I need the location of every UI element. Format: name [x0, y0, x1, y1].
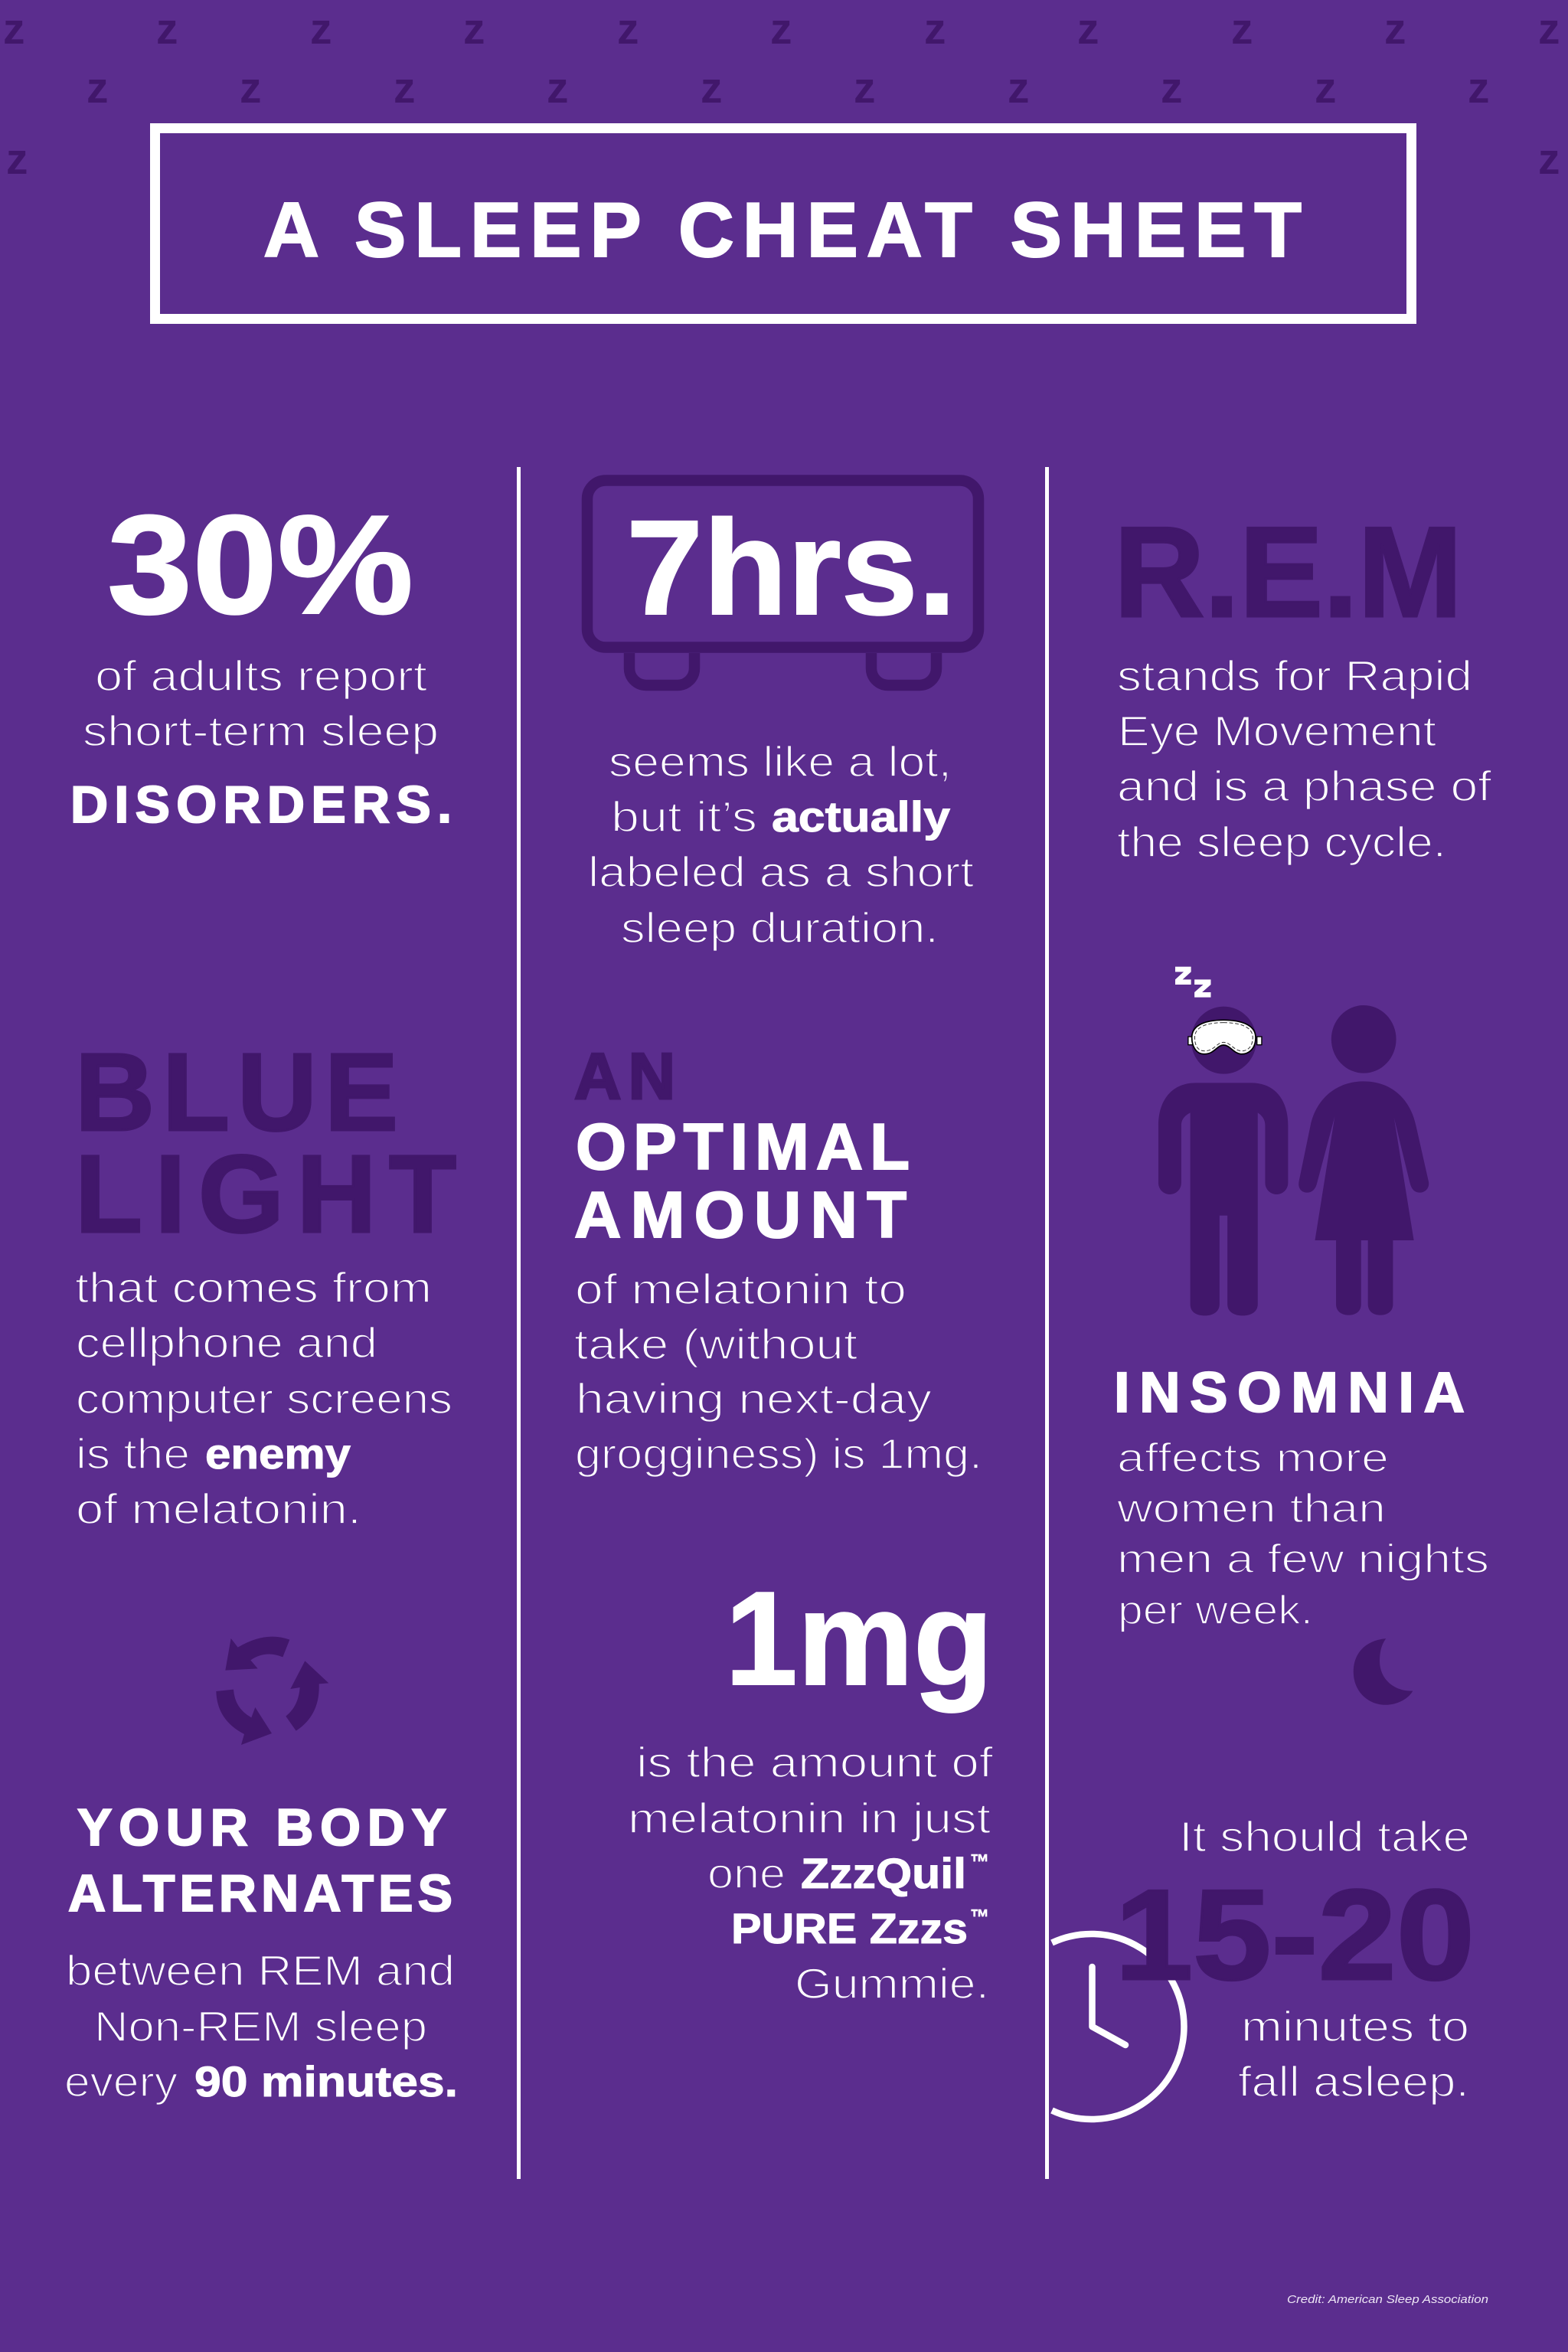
text: insomnia body [1116, 1436, 1489, 1633]
panel: optimal amount [574, 1040, 982, 1478]
text: 7hrs body: sleep duration. [621, 903, 939, 952]
text: 7hrs body [588, 737, 974, 952]
text: 1mg body: ™ [970, 1906, 989, 1930]
background z pattern: z [156, 5, 178, 54]
text: between REM [64, 1946, 458, 2105]
text: insomnia body: per week. [1118, 1588, 1313, 1633]
background z pattern: z [3, 5, 24, 54]
text: between REM: 90 minutes. [194, 2057, 458, 2105]
background z pattern: z [240, 64, 262, 113]
heading: your body alternates: ALTERNATES [68, 1864, 452, 1922]
text: REM body: the sleep cycle. [1117, 818, 1446, 866]
text: blue light body: computer screens [76, 1374, 452, 1423]
text: 1mg body [628, 1738, 994, 2007]
stat: 15-20: 15-20 [1115, 1863, 1475, 2007]
heading: blue light [75, 1031, 456, 1256]
text: insomnia body: women than [1116, 1486, 1386, 1531]
text: optimal body [574, 1265, 982, 1478]
text: 7hrs body: but it’s [611, 792, 757, 841]
text: blue light body: cellphone and [76, 1318, 377, 1367]
text: blue light body: that comes from [75, 1263, 432, 1312]
background z pattern: z [1231, 5, 1253, 54]
credit: Credit: American Sleep Association [1287, 2294, 1488, 2306]
background z pattern: z [1161, 64, 1182, 113]
background z pattern: z [854, 64, 876, 113]
text: blue light body: of melatonin. [76, 1485, 361, 1533]
text: between REM: between REM and [66, 1946, 455, 1994]
icon: bed [587, 481, 978, 685]
heading: an optimal amount [574, 1040, 910, 1252]
text: REM body: and is a phase of [1117, 762, 1491, 810]
background z pattern: z [701, 64, 723, 113]
text: 1mg body: is the amount of [636, 1738, 994, 1786]
panel: REM [1114, 500, 1491, 866]
text: between REM: every [64, 2057, 178, 2105]
heading: R.E.M: R.E.M [1114, 500, 1462, 644]
heading: your body alternates: YOUR BODY [77, 1798, 446, 1857]
text: REM body [1117, 652, 1491, 866]
background z pattern: z [1538, 135, 1560, 184]
text: 1mg body: PURE Zzzs [731, 1904, 968, 1952]
background z pattern: z [1468, 64, 1490, 113]
stat: 30%: 30% [107, 485, 413, 643]
text: 1mg body: one [707, 1849, 786, 1897]
text: insomnia body: affects more [1117, 1436, 1389, 1481]
heading: an optimal amount: OPTIMAL [576, 1111, 910, 1184]
text: 7hrs body: seems like a lot, [609, 737, 952, 786]
icon: clock [1052, 1934, 1184, 2119]
text: insomnia body: men a few nights [1117, 1537, 1489, 1582]
text: of adults report: short-term sleep [83, 707, 439, 755]
text: minutes to fall asleep: minutes to [1241, 2002, 1469, 2050]
text: 7hrs body: labeled as a short [588, 848, 974, 896]
panel: blue light [75, 1031, 456, 1533]
column dividers [517, 467, 1049, 2179]
icon: sleeping man and woman [1158, 967, 1429, 1315]
text: optimal body: having next-day [576, 1374, 932, 1423]
text: blue light body: is the [76, 1429, 190, 1478]
title box [155, 129, 1412, 318]
background z pattern: z [617, 5, 639, 54]
background z pattern: z [87, 64, 109, 113]
text: 1mg body: Gummie. [795, 1959, 989, 2007]
background z pattern: z [770, 5, 792, 54]
background z pattern: z [1538, 5, 1560, 54]
background z pattern: z [394, 64, 415, 113]
heading: blue light: LIGHT [75, 1132, 456, 1256]
title: A SLEEP CHEAT SHEET [263, 188, 1302, 273]
panel: 30 percent [70, 485, 452, 834]
heading: blue light: BLUE [75, 1031, 398, 1154]
panel: insomnia [1114, 1361, 1489, 1633]
text: 7hrs body: actually [772, 792, 950, 841]
text: blue light body [75, 1263, 452, 1533]
text: optimal body: grogginess) is 1mg. [575, 1429, 982, 1478]
background z pattern: z [547, 64, 568, 113]
stat: 1mg: 1mg [725, 1563, 993, 1713]
text: 1mg body: ™ [970, 1851, 989, 1875]
icon: cycle arrows [216, 1637, 328, 1745]
panel: 15-20 minutes [1115, 1812, 1475, 2105]
background z pattern: z [1315, 64, 1337, 113]
heading: an optimal amount: AMOUNT [574, 1179, 906, 1252]
background z pattern [3, 5, 1560, 184]
text: optimal body: take (without [574, 1320, 858, 1368]
background z pattern: z [6, 135, 28, 184]
heading: an optimal amount: AN [574, 1040, 675, 1113]
panel: 7 hours [587, 481, 978, 952]
text: it should take: It should take [1179, 1812, 1470, 1860]
text: minutes to fall asleep [1238, 2002, 1469, 2105]
text: REM body: stands for Rapid [1117, 652, 1472, 700]
background z pattern: z [1077, 5, 1099, 54]
heading: disorders: DISORDERS. [70, 776, 452, 834]
text: of adults report [83, 652, 439, 755]
panel: 1mg [628, 1563, 994, 2007]
background z pattern: z [1008, 64, 1029, 113]
text: blue light body: enemy [205, 1429, 351, 1478]
text: REM body: Eye Movement [1118, 707, 1436, 755]
background z pattern: z [924, 5, 946, 54]
text: of adults report: of adults report [95, 652, 428, 700]
background z pattern: z [1384, 5, 1406, 54]
stat: 7hrs: 7hrs. [626, 493, 956, 643]
panel: your body alternates [64, 1798, 458, 2105]
icon: moon [1354, 1638, 1413, 1705]
heading: insomnia: INSOMNIA [1114, 1361, 1465, 1424]
text: 1mg body: ZzzQuil [801, 1849, 966, 1897]
text: 1mg body: melatonin in just [628, 1794, 991, 1842]
icon: woman [1298, 1005, 1429, 1315]
icon: sleep mask [1188, 1020, 1262, 1054]
background z pattern: z [310, 5, 332, 54]
icon: z z [1175, 967, 1210, 998]
background z pattern: z [463, 5, 485, 54]
text: between REM: Non-REM sleep [94, 2002, 427, 2050]
icon: man [1158, 1007, 1288, 1315]
heading: your body alternates [68, 1798, 452, 1922]
text: optimal body: of melatonin to [575, 1265, 906, 1313]
text: minutes to fall asleep: fall asleep. [1238, 2057, 1469, 2105]
